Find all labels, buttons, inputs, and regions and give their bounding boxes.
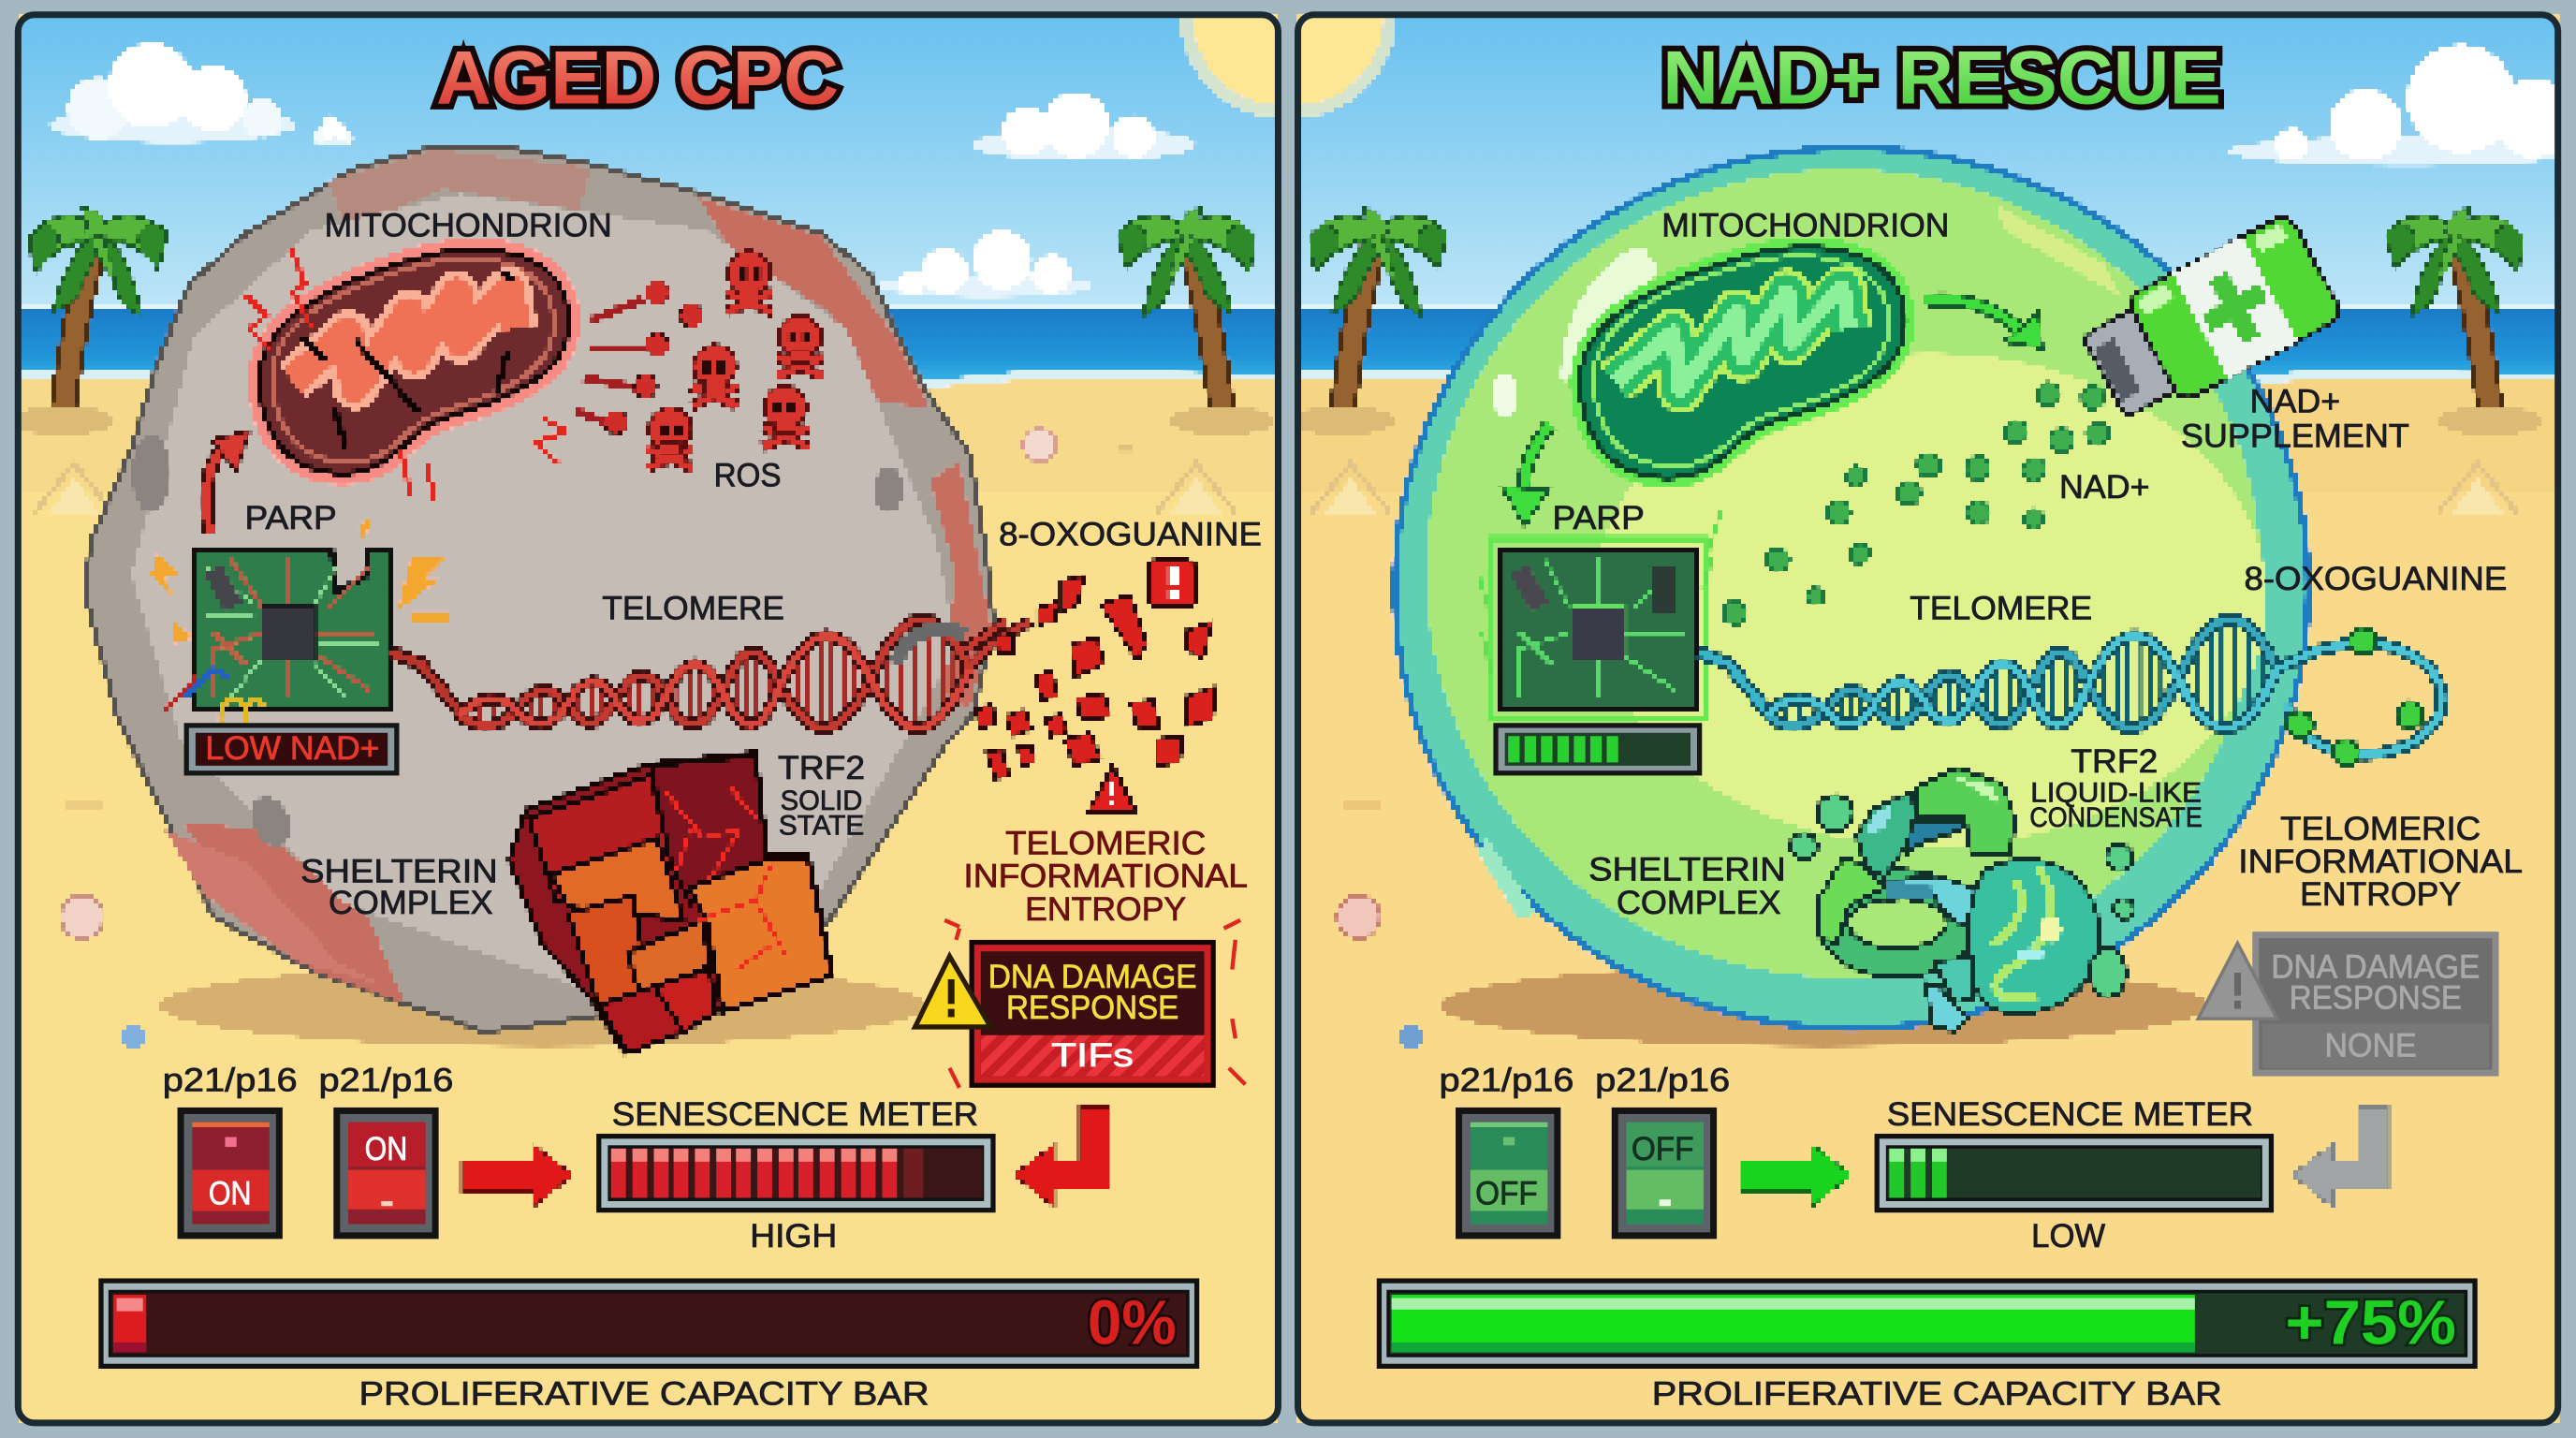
label: shelterin complex: SHELTERIN	[300, 853, 498, 889]
label: shelterin complex: COMPLEX	[329, 885, 493, 921]
arrow: switches to meter	[1740, 1144, 1852, 1208]
label: NONE: NONE	[2324, 1028, 2417, 1064]
p21/p16 switch, upper ON	[333, 1108, 439, 1239]
label: solid state	[779, 785, 864, 842]
title: AGED CPC: AGED CPC	[436, 37, 839, 121]
label: PARP: PARP	[1553, 500, 1645, 536]
p21/p16 switch, lower OFF	[1456, 1108, 1560, 1239]
shelterin complex: liquid-like condensate	[1791, 768, 2134, 1032]
label: solid state: SOLID	[781, 785, 862, 816]
label: PARP: PARP	[245, 500, 337, 536]
senescence meter, low	[1875, 1134, 2274, 1212]
label: telomeric informational entropy	[963, 826, 1248, 928]
arrow: mitochondrion to NAD+	[1925, 300, 2042, 348]
label: LOW NAD+: LOW NAD+	[205, 730, 379, 767]
label: telomeric informational entropy: INFORMATIONAL	[963, 858, 1248, 895]
label: senescence meter: SENESCENCE METER	[1887, 1096, 2253, 1133]
label: p21/p16 right: p21/p16	[1595, 1062, 1730, 1098]
panel border	[1298, 15, 2558, 1423]
label: senescence meter: SENESCENCE METER	[612, 1096, 978, 1133]
mitochondrion, healthy	[1580, 247, 1905, 477]
PARP circuit board, healthy	[1479, 509, 1721, 718]
label: TRF2: TRF2	[2071, 743, 2158, 780]
arrow: PARP to mitochondrion	[206, 431, 250, 533]
p21/p16 switch, upper OFF	[1612, 1108, 1717, 1239]
label: mitochondrion: MITOCHONDRION	[1661, 208, 1949, 244]
label: 8-oxoguanine: 8-OXOGUANINE	[999, 517, 1262, 553]
cell shadow	[159, 964, 929, 1047]
label: ROS: ROS	[714, 458, 782, 494]
proliferative capacity bar, empty	[98, 1278, 1199, 1369]
DNA damage response, inactive	[2198, 932, 2499, 1077]
label: mitochondrion: MITOCHONDRION	[325, 208, 612, 244]
8-oxoguanine repaired beads	[2287, 627, 2423, 766]
value: 0%: 0%	[1088, 1289, 1177, 1358]
label: DNA damage response: DNA DAMAGE	[2271, 948, 2480, 985]
aged cell body	[85, 146, 994, 1032]
label: p21/p16 left: p21/p16	[1439, 1062, 1573, 1098]
proliferative capacity bar, 75 percent	[1377, 1278, 2478, 1369]
beach scenery	[21, 18, 1275, 1049]
label: switch OFF lower: OFF	[1475, 1175, 1538, 1211]
PARP activity bar	[1493, 723, 1702, 775]
label: telomeric informational entropy: TELOMERIC	[2280, 811, 2481, 847]
icon: red alert square	[1149, 560, 1196, 607]
label: solid state: STATE	[779, 811, 864, 842]
NAD+ supplement bottle	[2076, 213, 2344, 429]
label: telomeric informational entropy: ENTROPY	[2300, 876, 2461, 913]
label: LOW: LOW	[2031, 1218, 2105, 1255]
arrow: inactive feedback	[2291, 1108, 2389, 1208]
beach scenery	[1193, 0, 2576, 1049]
label: p21/p16 left: p21/p16	[163, 1062, 298, 1098]
p21/p16 switch, lower ON	[178, 1108, 283, 1239]
panel: NAD+ rescue	[1193, 0, 2576, 1423]
label: NAD+ supplement: NAD+	[2250, 384, 2340, 420]
label: telomere: TELOMERE	[1910, 591, 2092, 627]
shelterin complex: solid red bricks	[509, 753, 833, 1053]
8-oxoguanine fragments	[976, 575, 1216, 779]
label: DNA damage response: RESPONSE	[1006, 990, 1178, 1026]
label: proliferative capacity bar: PROLIFERATIVE CAPACITY BAR	[359, 1376, 929, 1413]
label: NAD+ supplement	[2181, 384, 2409, 454]
label: NAD+: NAD+	[2059, 469, 2150, 506]
label: TIFs: TIFs	[1051, 1037, 1134, 1074]
label: liquid-like condensate: CONDENSATE	[2029, 802, 2203, 833]
LOW NAD+ status box	[184, 723, 399, 775]
label: shelterin complex	[1588, 852, 1786, 921]
label: shelterin complex: COMPLEX	[1617, 885, 1781, 921]
arrow: switches to meter	[461, 1144, 574, 1208]
label: telomere: TELOMERE	[602, 591, 784, 627]
label: telomeric informational entropy	[2238, 811, 2523, 913]
mitochondrion, damaged	[246, 246, 568, 500]
label: DNA damage response: DNA DAMAGE	[988, 959, 1197, 995]
title: NAD+ RESCUE: NAD+ RESCUE	[1662, 37, 2221, 121]
ROS streaks and particles	[575, 281, 703, 433]
telomere DNA helix, fraying	[391, 620, 1032, 729]
label: DNA damage response: RESPONSE	[2290, 980, 2462, 1017]
label: liquid-like condensate: LIQUID-LIKE	[2030, 777, 2202, 808]
label: DNA damage response	[2271, 948, 2480, 1017]
cell shadow	[1439, 964, 2208, 1047]
label: proliferative capacity bar: PROLIFERATIVE CAPACITY BAR	[1652, 1376, 2222, 1413]
label: shelterin complex: SHELTERIN	[1588, 852, 1786, 888]
senescence meter, high	[596, 1134, 996, 1212]
label: switch OFF upper: OFF	[1632, 1131, 1694, 1167]
label: switch ON lower: ON	[209, 1175, 252, 1211]
icon: red warning triangle	[1088, 766, 1137, 814]
label: HIGH: HIGH	[750, 1218, 837, 1255]
NAD+ molecules	[1723, 383, 2110, 624]
label: DNA damage response	[988, 959, 1197, 1026]
arrow: mitochondrion to PARP	[1501, 424, 1551, 526]
panel border	[18, 15, 1278, 1423]
label: p21/p16 right: p21/p16	[318, 1062, 453, 1098]
telomere DNA helix, repaired	[1699, 620, 2442, 755]
label: telomeric informational entropy: TELOMERIC	[1005, 826, 1206, 862]
label: switch ON upper: ON	[365, 1131, 407, 1167]
PARP circuit board, damaged	[151, 516, 450, 731]
label: liquid-like condensate	[2029, 777, 2203, 833]
label: 8-oxoguanine: 8-OXOGUANINE	[2244, 561, 2507, 597]
value: +75%: +75%	[2285, 1289, 2456, 1358]
panel controls and labels: NAD+ rescue	[1298, 15, 2558, 1423]
label: telomeric informational entropy: ENTROPY	[1025, 891, 1186, 928]
DNA damage response alarm	[915, 920, 1245, 1088]
ROS skulls	[648, 252, 823, 468]
panel controls and labels: aged CPC	[18, 15, 1278, 1423]
rescued cell: green bubble	[1395, 148, 2308, 1029]
arrow: DNA damage to meter	[1014, 1108, 1110, 1208]
label: NAD+ supplement: SUPPLEMENT	[2181, 418, 2409, 454]
label: telomeric informational entropy: INFORMATIONAL	[2238, 844, 2523, 880]
label: shelterin complex	[300, 853, 498, 921]
label: TRF2: TRF2	[778, 750, 865, 786]
panel: aged CPC	[10, 0, 1383, 1423]
